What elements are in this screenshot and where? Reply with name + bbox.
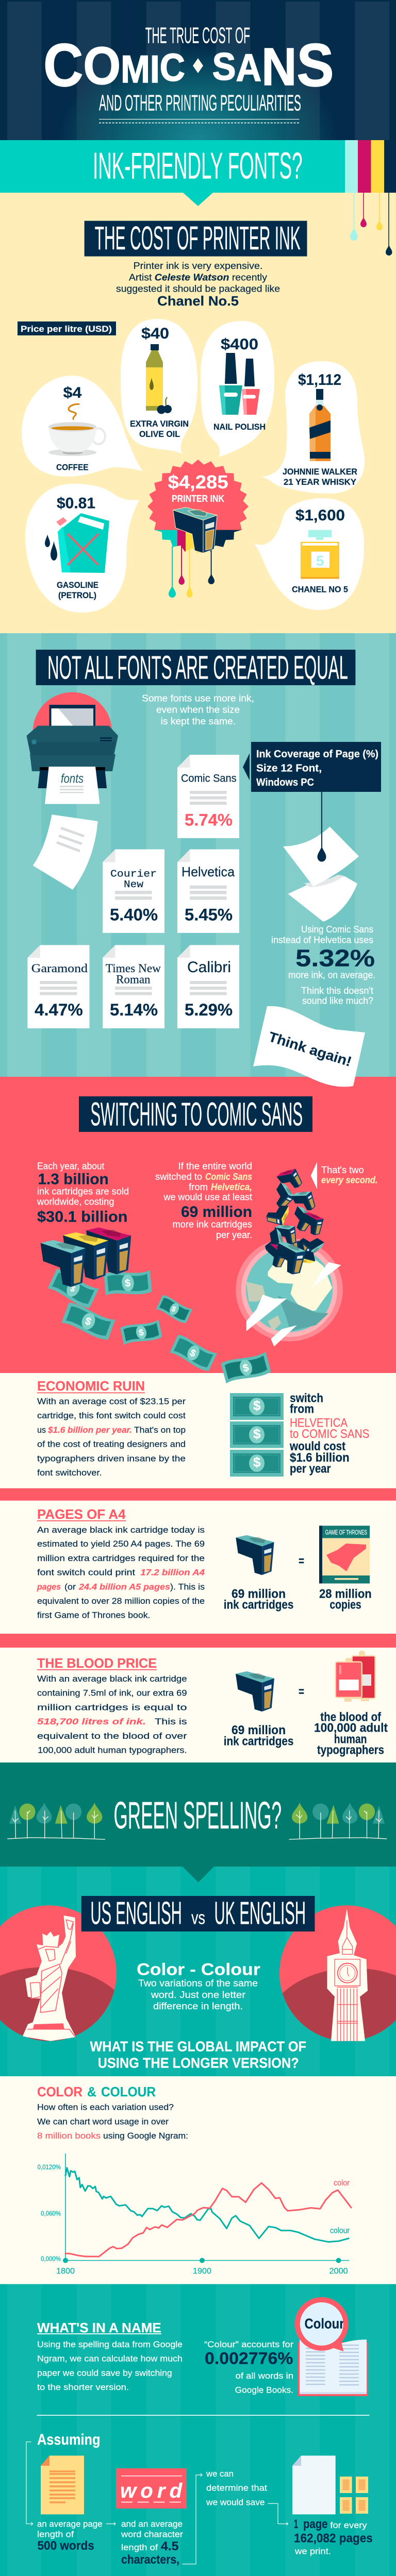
bubble: olive oil: OLIVE OIL bbox=[139, 429, 180, 439]
note: times new roman bbox=[103, 945, 164, 1028]
title: comic: O bbox=[83, 36, 121, 95]
note: calibri: Calibri bbox=[187, 959, 231, 976]
icon: game of thrones book: GAME OF THRONES bbox=[325, 1529, 367, 1536]
bubble: coffee: $4 bbox=[63, 384, 82, 401]
callout: two every second: every second. bbox=[321, 1175, 377, 1185]
text: average word length bbox=[121, 2519, 183, 2567]
text: we can determine: we would save bbox=[206, 2497, 265, 2507]
callout: two every second bbox=[311, 1162, 377, 1189]
label: blood of typographers: the blood of bbox=[320, 1710, 382, 1724]
title: sans: N bbox=[261, 37, 296, 96]
panel: the blood price bbox=[0, 1648, 396, 1762]
text block: paper we could save by switching bbox=[37, 2368, 172, 2378]
icon: word box: word bbox=[120, 2480, 183, 2502]
bubble: whisky bbox=[260, 361, 365, 494]
icon: flying paper bbox=[33, 815, 98, 890]
label: 69 million ink cartridges: 69 million bbox=[232, 1587, 286, 1601]
heading: global impact question: USING THE LONGER VERSION? bbox=[98, 2055, 299, 2071]
icon: three banknotes: $ bbox=[253, 1398, 261, 1413]
text block: containing 7.5ml of ink, our extra 69 bbox=[37, 1688, 187, 1698]
text block: to the shorter version. bbox=[37, 2382, 129, 2392]
label: blood of typographers: human bbox=[334, 1732, 367, 1747]
label: blood of typographers bbox=[314, 1710, 388, 1757]
panel: cream ink section background bbox=[0, 193, 396, 633]
text block: switch cost: per year bbox=[290, 1462, 331, 1476]
icon: printer bbox=[27, 692, 118, 804]
header panel: THE TRUE COST OF bbox=[145, 23, 250, 48]
text block: cartridges sold: Each year, about bbox=[37, 1161, 104, 1172]
heading bbox=[37, 2084, 156, 2099]
line chart: color bbox=[334, 2179, 350, 2188]
strip: coral divider bbox=[0, 1488, 396, 1501]
label: 69 million ink cartridges: ink cartridges bbox=[224, 1598, 293, 1612]
bubble: whisky: JOHNNIE WALKER bbox=[283, 467, 357, 477]
line chart: colour bbox=[330, 2227, 350, 2235]
text block: color colour bbox=[137, 1960, 260, 2011]
text block: using comic sans: sound like much? bbox=[302, 995, 373, 1006]
note: times new roman: Roman bbox=[116, 973, 151, 986]
icon: pale page and small pages bbox=[292, 2455, 368, 2514]
heading: us english vs uk english: vs bbox=[191, 1907, 205, 1928]
icon: three banknotes: $ bbox=[253, 1426, 261, 1442]
symbol: equals: = bbox=[299, 1685, 304, 1699]
heading: COLOUR bbox=[101, 2084, 156, 2099]
heading: WHAT'S IN A NAME bbox=[37, 2320, 161, 2335]
heading: COLOR bbox=[37, 2084, 82, 2099]
line chart: 0,060% bbox=[41, 2210, 61, 2217]
text block bbox=[37, 1396, 186, 1478]
note: courier new bbox=[103, 849, 164, 933]
bubble: whisky: $1,112 bbox=[298, 371, 341, 388]
text block: using comic sans bbox=[271, 924, 375, 1006]
text: average word length: 4.5 bbox=[161, 2539, 178, 2553]
strip: coral divider bbox=[0, 1634, 396, 1648]
note: helvetica bbox=[177, 849, 239, 933]
text block: 100,000 adult human typographers. bbox=[38, 1745, 187, 1755]
banner: think again bbox=[253, 1006, 365, 1087]
bubble: olive oil: $40 bbox=[141, 325, 169, 342]
icon: cartridge bbox=[236, 1671, 274, 1711]
text block: using comic sans: more ink, on average. bbox=[288, 970, 375, 980]
icon: papers with ink drip bbox=[283, 792, 359, 922]
text block: cartridges sold: 1.3 billion bbox=[38, 1171, 109, 1188]
section: what's in a name bbox=[0, 2284, 396, 2576]
title: comic: C bbox=[160, 46, 185, 89]
text block: pages bbox=[37, 1582, 61, 1591]
panel: pages of a4 bbox=[0, 1501, 396, 1634]
section background: not all fonts bbox=[0, 633, 396, 1077]
arrow: page to word bbox=[106, 2522, 116, 2525]
text block: equivalent to over 28 million copies of the bbox=[37, 1596, 205, 1606]
text block: if the entire world switched: from bbox=[189, 1182, 208, 1192]
note: garamond: 4.47% bbox=[35, 1001, 83, 1019]
icon: perfume bottle bbox=[301, 530, 339, 579]
text block: equivalent to the blood of over bbox=[37, 1731, 187, 1741]
label: 28 million copies: 28 million bbox=[319, 1587, 372, 1601]
band: green spelling bbox=[0, 1762, 396, 1883]
text block bbox=[37, 1674, 187, 1755]
title: sans: S bbox=[296, 31, 334, 99]
icon: word box bbox=[116, 2468, 187, 2509]
icon: cartridge bbox=[236, 1535, 274, 1575]
heading: global impact question bbox=[90, 2038, 306, 2071]
text: 1 page for every: for every bbox=[330, 2520, 367, 2530]
icon: falling banknote: $ bbox=[242, 1362, 250, 1375]
text block: typographers driven insane by the bbox=[37, 1453, 186, 1463]
text block: using comic sans: Think this doesn't bbox=[301, 986, 373, 996]
text block: if the entire world switched bbox=[155, 1161, 252, 1240]
text block: using comic sans: instead of Helvetica uses bbox=[271, 935, 373, 945]
band: ink-friendly fonts bbox=[0, 140, 396, 206]
bubble: gasoline: $0.81 bbox=[57, 495, 95, 512]
bubble: olive oil: EXTRA VIRGIN bbox=[130, 419, 189, 429]
label: 28 million copies bbox=[319, 1587, 372, 1612]
text block: This is bbox=[155, 1717, 187, 1726]
text: 1 page for every: 162,082 pages bbox=[294, 2532, 373, 2546]
note: helvetica: 5.45% bbox=[185, 905, 233, 924]
icon: coffee cup bbox=[48, 404, 105, 456]
text block: switch cost bbox=[289, 1391, 369, 1476]
text: 1 page for every bbox=[294, 2517, 373, 2556]
icon: olive oil bottle bbox=[146, 344, 172, 414]
text block: ). This is bbox=[170, 1582, 205, 1591]
text block: (or bbox=[64, 1582, 76, 1591]
text block: switch cost: HELVETICA bbox=[290, 1416, 348, 1430]
label: price per litre bbox=[18, 321, 116, 335]
text block: 24.4 billion A5 pages bbox=[78, 1582, 170, 1591]
callout: ink coverage: Ink Coverage of Page (%) bbox=[256, 749, 378, 760]
text block: How often is each variation used? bbox=[37, 2103, 174, 2112]
bubble: chanel no 5: $1,600 bbox=[295, 507, 345, 524]
note: garamond: Garamond bbox=[31, 962, 88, 975]
text block: million cartridges is equal to bbox=[37, 1703, 187, 1713]
text block: intro: Chanel No.5 bbox=[157, 293, 239, 309]
bubble: nail polish: $400 bbox=[221, 336, 258, 353]
label: 69 million ink cartridges bbox=[224, 1587, 293, 1612]
icon: flying money: $ bbox=[84, 1315, 93, 1328]
text: average page length: length of bbox=[37, 2529, 74, 2539]
bubble: gasoline: (PETROL) bbox=[58, 590, 96, 600]
text block: switch cost: to COMIC SANS bbox=[290, 1427, 369, 1441]
label: 69 million ink cartridges: 69 million bbox=[232, 1723, 286, 1737]
text: assuming: Assuming bbox=[37, 2431, 100, 2448]
note: comic sans: 5.74% bbox=[185, 811, 233, 829]
text block: colour accounts for: of all words in bbox=[236, 2371, 293, 2381]
arrow: assuming to page bbox=[26, 2442, 33, 2525]
bubble: chanel no 5: CHANEL NO 5 bbox=[292, 585, 348, 595]
text: we can determine bbox=[206, 2469, 267, 2507]
text block: cartridge, this font switch could cost bbox=[37, 1411, 186, 1420]
note: calibri: 5.29% bbox=[185, 1001, 233, 1019]
text block: intro bbox=[116, 261, 280, 309]
icon: flying money: $ bbox=[69, 1284, 77, 1294]
text block: We can chart word usage in over bbox=[37, 2116, 169, 2127]
text block: 17.2 billion A4 bbox=[140, 1567, 205, 1577]
text block: million extra cartridges required for the bbox=[37, 1553, 205, 1563]
label: blood of typographers: typographers bbox=[317, 1743, 384, 1757]
bubble: whisky: 21 YEAR WHISKY bbox=[284, 477, 357, 487]
panel: color and colour chart bbox=[0, 2076, 396, 2284]
icon: flying money bbox=[47, 1268, 218, 1372]
text block: Using the spelling data from Google bbox=[37, 2340, 183, 2349]
text: average word length: word character bbox=[121, 2529, 183, 2539]
text block: if the entire world switched: more ink cartridges bbox=[173, 1219, 252, 1229]
heading: global impact question: WHAT IS THE GLOBAL IMPACT OF bbox=[90, 2038, 306, 2055]
text block: intro: Printer ink is very expensive. bbox=[133, 261, 263, 271]
callout: two every second: That's two bbox=[321, 1165, 364, 1175]
text: 1 page for every: we print. bbox=[294, 2547, 331, 2556]
text block bbox=[37, 2340, 183, 2392]
line chart: 0,0120% bbox=[37, 2164, 61, 2171]
text block: us bbox=[37, 1425, 46, 1435]
text block: intro: suggested it should be packaged like bbox=[116, 283, 280, 294]
label: 69 million ink cartridges bbox=[224, 1723, 293, 1748]
symbol: equals: = bbox=[299, 1554, 304, 1568]
heading: & bbox=[87, 2084, 96, 2099]
heading: ECONOMIC RUIN bbox=[37, 1378, 145, 1394]
icon: globe with clouds bbox=[236, 1238, 343, 1347]
text block: That's on top bbox=[134, 1425, 186, 1435]
icon: cartridge pile bbox=[259, 1165, 325, 1276]
text: we can determine: determine that bbox=[206, 2483, 267, 2493]
banner: think again: Think again! bbox=[267, 1029, 353, 1070]
text: average word length: characters, bbox=[121, 2553, 179, 2567]
icon: ink cartridge bbox=[173, 507, 217, 553]
note: comic sans: Comic Sans bbox=[181, 773, 237, 785]
text block: color colour: Color - Colour bbox=[137, 1960, 260, 1978]
icon: open book with magnifier: Colour bbox=[304, 2316, 344, 2332]
text block: colour accounts for bbox=[204, 2340, 293, 2395]
text: average word length: length of bbox=[121, 2543, 158, 2552]
text: average word length: and an average bbox=[121, 2519, 183, 2529]
text block: switch cost: $1.6 billion bbox=[290, 1451, 350, 1465]
text block: if the entire world switched: 69 million bbox=[181, 1204, 252, 1221]
title: comic: I bbox=[150, 47, 160, 91]
illustration: big ben bbox=[279, 1905, 396, 2041]
section background: switching to comic sans bbox=[0, 1077, 396, 1373]
text block: color colour: Two variations of the same bbox=[138, 1978, 258, 1989]
heading: PAGES OF A4 bbox=[37, 1506, 126, 1522]
text block: some fonts use more ink: is kept the same. bbox=[161, 716, 236, 726]
label: blood of typographers: 100,000 adult bbox=[314, 1721, 388, 1735]
icon: trees left bbox=[8, 1803, 105, 1839]
icon: trees right bbox=[289, 1803, 387, 1839]
text: average page length bbox=[37, 2519, 102, 2553]
text block: if the entire world switched: Comic Sans bbox=[205, 1172, 252, 1182]
text block: cartridges sold: worldwide, costing bbox=[37, 1196, 114, 1207]
heading: the cost of printer ink bbox=[85, 219, 307, 257]
text block: $1.6 billion per year. bbox=[47, 1425, 132, 1435]
callout: ink coverage: Windows PC bbox=[256, 777, 314, 788]
text block: some fonts use more ink: Some fonts use more ink, bbox=[142, 693, 254, 704]
icon: diamond bbox=[193, 58, 203, 73]
text block: some fonts use more ink: even when the size bbox=[156, 705, 240, 715]
badge: printer ink starburst bbox=[147, 460, 249, 598]
bubble: olive oil bbox=[121, 319, 197, 454]
text block: using Google Ngram: bbox=[103, 2131, 188, 2141]
icon: open book with magnifier bbox=[295, 2297, 368, 2396]
callout: ink coverage bbox=[243, 742, 381, 792]
icon: flying money: $ bbox=[138, 1327, 145, 1338]
icon: flying money: $ bbox=[170, 1304, 177, 1314]
line chart: 1900 bbox=[193, 2267, 211, 2276]
text: 1 page for every: 1 bbox=[294, 2517, 298, 2531]
text: we can determine: we can bbox=[206, 2469, 234, 2479]
label: 28 million copies: copies bbox=[329, 1598, 361, 1612]
icon: ink drips bbox=[350, 193, 392, 256]
icon: perfume bottle: 5 bbox=[316, 553, 324, 569]
text block: of the cost of treating designers and bbox=[37, 1439, 186, 1449]
text block: cartridges sold bbox=[37, 1161, 129, 1225]
icon: three banknotes bbox=[230, 1393, 284, 1477]
label: price per litre: Price per litre (USD) bbox=[21, 324, 112, 334]
text block: With an average cost of $23.15 per bbox=[37, 1396, 186, 1406]
icon: flying money: $ bbox=[188, 1347, 197, 1360]
text block: colour accounts for: 0.002776% bbox=[205, 2349, 293, 2367]
note: times new roman: Times New bbox=[106, 962, 161, 975]
text block: if the entire world switched: switched to bbox=[155, 1172, 202, 1182]
text block: if the entire world switched: we would use at least bbox=[163, 1192, 252, 1202]
badge: printer ink starburst: PRINTER INK bbox=[172, 494, 224, 504]
note: courier new: New bbox=[124, 879, 144, 890]
heading: us english vs uk english: US ENGLISH bbox=[90, 1896, 182, 1931]
text block: intro: Artist Celeste Watson recently bbox=[129, 273, 267, 283]
line chart: 2000 bbox=[329, 2267, 348, 2276]
note: courier new: Courier bbox=[110, 868, 157, 879]
label: 69 million ink cartridges: ink cartridges bbox=[224, 1734, 293, 1748]
text: average page length: an average page bbox=[37, 2519, 102, 2529]
icon: stack of three cartridges bbox=[41, 1227, 131, 1287]
panel: economic ruin bbox=[0, 1373, 396, 1488]
icon: game of thrones book bbox=[319, 1526, 370, 1584]
text block: switch cost: would cost bbox=[289, 1439, 345, 1453]
icon: printer: fonts bbox=[61, 772, 84, 786]
text block: With an average black ink cartridge bbox=[37, 1674, 187, 1684]
text block bbox=[37, 1525, 205, 1620]
bubble: chanel no 5 bbox=[254, 498, 364, 610]
bubble: gasoline: GASOLINE bbox=[57, 580, 98, 590]
text block: switch cost: switch bbox=[290, 1391, 323, 1405]
text block: if the entire world switched: per year. bbox=[216, 1230, 252, 1240]
text block: 8 million books bbox=[37, 2131, 101, 2141]
note: courier new: 5.40% bbox=[110, 905, 158, 924]
text block: font switchover. bbox=[37, 1468, 102, 1478]
title: sans: A bbox=[236, 46, 261, 89]
text block: first Game of Thrones book. bbox=[37, 1610, 151, 1620]
icon: blood bags bbox=[336, 1651, 375, 1702]
bubble: nail polish bbox=[201, 321, 274, 457]
note: garamond bbox=[27, 945, 90, 1028]
header panel bbox=[0, 0, 396, 235]
title: sans: S bbox=[212, 45, 236, 88]
heading: THE BLOOD PRICE bbox=[37, 1655, 157, 1671]
text block: if the entire world switched: If the entire world bbox=[178, 1161, 252, 1172]
text block: using comic sans: Using Comic Sans bbox=[301, 924, 373, 935]
title: comic: C bbox=[43, 31, 83, 99]
text block: using comic sans: 5.32% bbox=[295, 944, 375, 971]
text block: Ngram, we can calculate how much bbox=[37, 2353, 183, 2364]
line chart: 0,000% bbox=[41, 2256, 61, 2263]
text block: font switch could print bbox=[37, 1567, 135, 1577]
text block: 518,700 litres of ink. bbox=[37, 1717, 146, 1726]
text block: some fonts use more ink bbox=[142, 693, 254, 726]
section background: teal us vs uk bbox=[0, 1867, 396, 2076]
text block: An average black ink cartridge today is bbox=[37, 1525, 205, 1535]
text block: color colour: difference in length. bbox=[153, 2001, 243, 2011]
icon: falling banknote bbox=[221, 1350, 271, 1385]
text block: cartridges sold: ink cartridges are sold bbox=[37, 1187, 129, 1197]
bubble: coffee: COFFEE bbox=[56, 463, 89, 472]
note: helvetica: Helvetica bbox=[182, 864, 235, 879]
arrow: word to determine bbox=[183, 2473, 202, 2564]
text: average page length: 500 words bbox=[37, 2539, 94, 2553]
icon: yellow page bbox=[41, 2455, 84, 2514]
text block: color colour: word. Just one letter bbox=[151, 1990, 245, 2000]
text block: switch cost: from bbox=[290, 1402, 314, 1416]
title: comic: M bbox=[121, 47, 150, 91]
text block: cartridges sold: $30.1 billion bbox=[37, 1208, 128, 1225]
text block: colour accounts for: “Colour” accounts for bbox=[204, 2340, 293, 2349]
badge: printer ink starburst: $4,285 bbox=[168, 471, 228, 493]
callout: ink coverage: Size 12 Font, bbox=[256, 763, 322, 774]
text block: colour accounts for: Google Books. bbox=[235, 2385, 293, 2395]
icon: polish bottles bbox=[219, 353, 260, 415]
icon: fuel can bbox=[45, 513, 109, 573]
arrow: save to page count bbox=[268, 2503, 288, 2525]
text block bbox=[37, 2103, 188, 2141]
bubble: nail polish: NAIL POLISH bbox=[213, 422, 266, 432]
icon: three banknotes: $ bbox=[253, 1454, 261, 1470]
icon: flying money: $ bbox=[124, 1278, 131, 1289]
bubble: coffee bbox=[22, 376, 143, 477]
note: times new roman: 5.14% bbox=[110, 1001, 158, 1019]
bubble: gasoline bbox=[25, 484, 139, 613]
note: calibri bbox=[177, 945, 239, 1028]
text block: estimated to yield 250 A4 pages. The 69 bbox=[37, 1539, 205, 1549]
line chart bbox=[37, 2154, 351, 2276]
text block: if the entire world switched: Helvetica, bbox=[211, 1182, 252, 1192]
line chart: 1800 bbox=[56, 2267, 75, 2276]
text: 1 page for every: page bbox=[303, 2517, 328, 2531]
icon: whisky bottle bbox=[309, 389, 331, 461]
illustration: statue of liberty bbox=[0, 1905, 117, 2041]
note: comic sans bbox=[177, 755, 239, 838]
